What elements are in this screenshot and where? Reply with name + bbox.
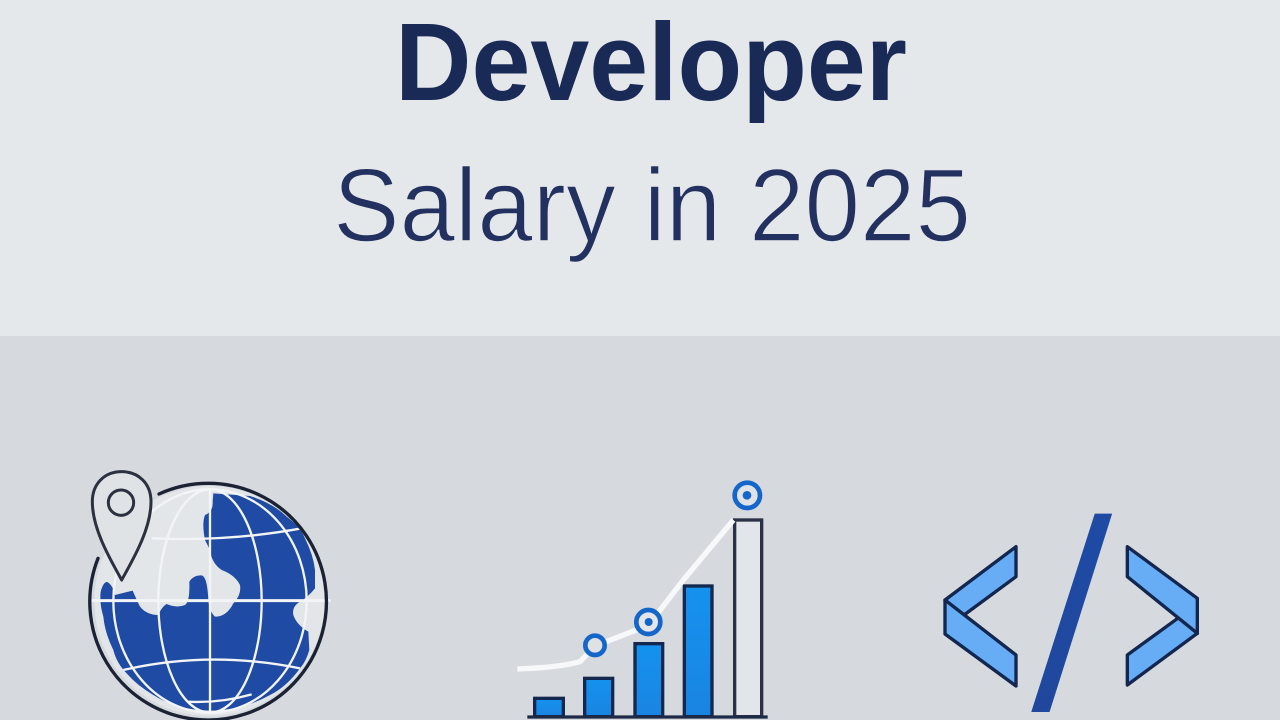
- left chevron: [945, 547, 1016, 686]
- icon: globe with location pin: [89, 472, 331, 720]
- right chevron: [1127, 547, 1197, 685]
- globe equator: [89, 596, 331, 605]
- bar 5: [735, 520, 762, 717]
- subtitle: Salary in 2025: Salary in 2025: [333, 148, 971, 264]
- pin ring: [108, 490, 134, 515]
- panel: title band background: [0, 0, 1280, 336]
- chart: rising salary bars with trend line: [517, 483, 768, 717]
- bar 3: [635, 644, 663, 717]
- globe sphere: [94, 486, 324, 716]
- globe grid lines: [113, 488, 307, 713]
- panel: icon band background: [0, 336, 1280, 720]
- bar 4: [684, 586, 712, 717]
- marker 3: [735, 483, 760, 508]
- location pin: [92, 472, 151, 580]
- chart baseline: [527, 712, 768, 720]
- marker 1: [585, 636, 605, 655]
- globe landmass: [100, 493, 315, 711]
- bar 1: [535, 698, 563, 717]
- bar 2: [585, 678, 613, 717]
- trend line: [517, 520, 733, 669]
- title: Developer: Developer: [395, 1, 907, 124]
- icon: code brackets: [945, 514, 1197, 712]
- slash: [1032, 514, 1112, 712]
- marker 2: [636, 610, 660, 634]
- globe outline arc: [90, 483, 326, 720]
